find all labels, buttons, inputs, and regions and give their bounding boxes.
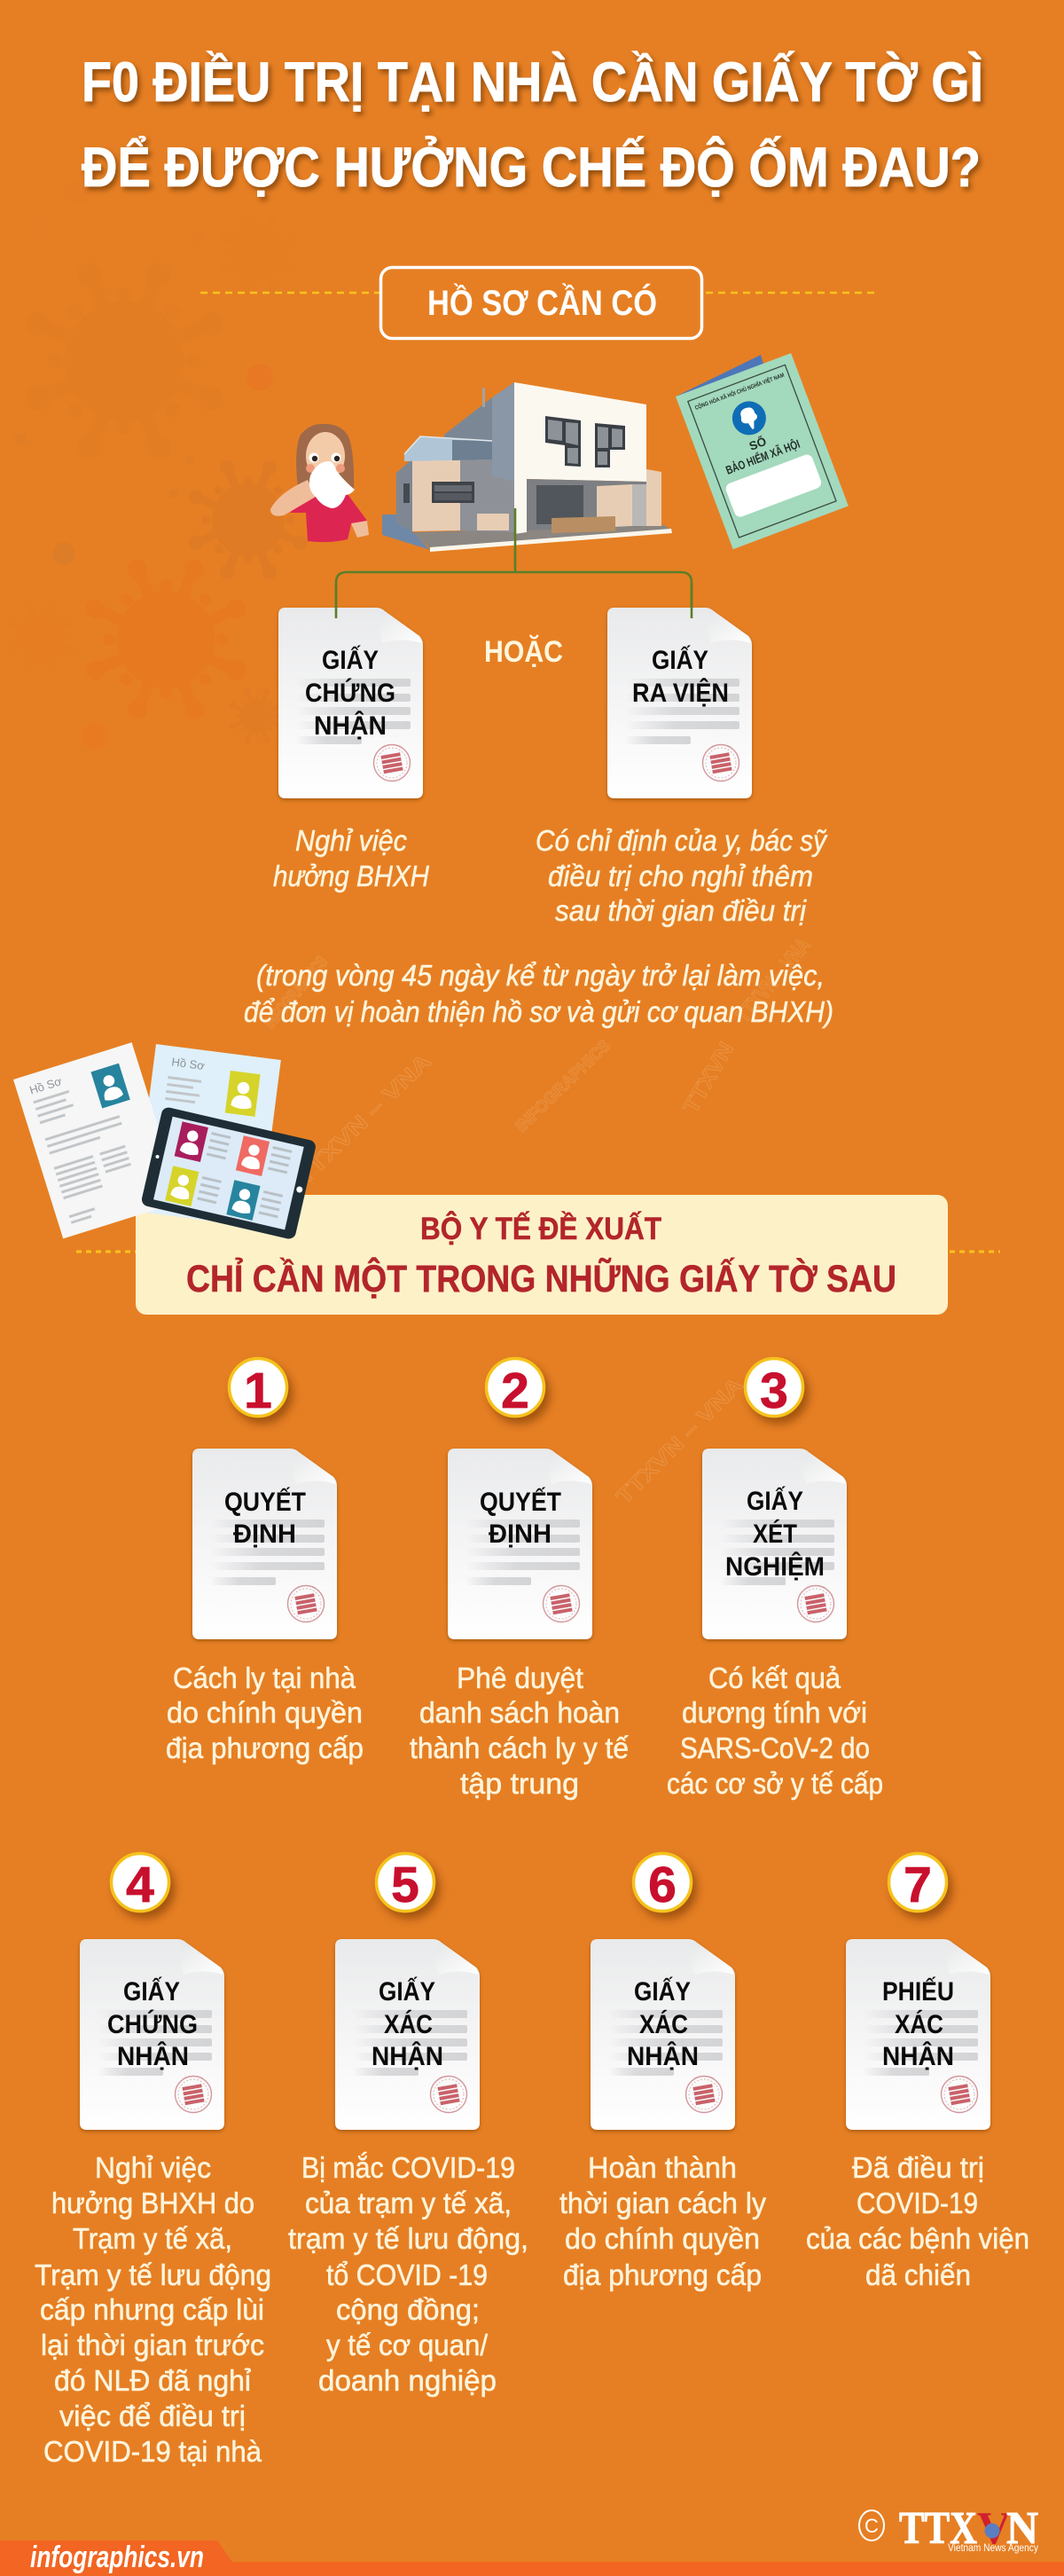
title: ĐỂ ĐƯỢC HƯỞNG CHẾ ĐỘ ỐM ĐAU? (82, 136, 981, 199)
item 7: phiếu xác nhận (806, 1854, 1029, 2291)
logo: TTXVN: N (1006, 2503, 1038, 2554)
label: hoặc: HOẶC (484, 635, 563, 669)
item 1: quyết định, cách ly tại nhà (166, 1359, 364, 1764)
item 2: quyết định, phê duyệt: 2 (501, 1363, 529, 1419)
item 7: phiếu xác nhận: PHIẾU (882, 1976, 954, 2007)
watermarks: TTXVN – VNA (732, 933, 816, 1027)
logo: TTXVN: Vietnam News Agency (948, 2541, 1038, 2554)
document: giấy ra viện: GIẤY (652, 645, 708, 675)
illustration: sick woman (270, 424, 369, 542)
item 7: phiếu xác nhận: dã chiến (865, 2258, 971, 2291)
watermarks: INFOGRAPHICS (512, 1036, 614, 1136)
document: giấy chứng nhận: NHẬN (314, 711, 387, 741)
item 5: giấy xác nhận, bị mắc: XÁC (384, 2009, 433, 2039)
item 5: giấy xác nhận, bị mắc: NHẬN (372, 2041, 443, 2071)
illustration: house (382, 382, 672, 552)
item 6: giấy xác nhận, hoàn thành: Hoàn thành (588, 2151, 737, 2184)
watermarks: TTXVN (679, 1038, 739, 1118)
watermarks: TTXVN – VNA (292, 1049, 436, 1190)
item 3: giấy xét nghiệm: SARS-CoV-2 do (680, 1732, 870, 1764)
item 2: quyết định, phê duyệt: QUYẾT (480, 1487, 561, 1517)
item 7: phiếu xác nhận: Đã điều trị (852, 2151, 984, 2184)
item 6: giấy xác nhận, hoàn thành: địa phương cấp (563, 2258, 762, 2291)
watermarks: TTXVN – VNA (612, 1373, 748, 1509)
item 1: quyết định, cách ly tại nhà: 1 (244, 1363, 272, 1419)
caption: chỉ định: sau thời gian điều trị (555, 894, 808, 927)
item 7: phiếu xác nhận: 7 (904, 1857, 932, 1913)
item 5: giấy xác nhận, bị mắc: GIẤY (379, 1976, 435, 2007)
note: 45 ngày: (trong vòng 45 ngày kể từ ngày trở lại làm việc, (256, 959, 825, 992)
watermarks (261, 933, 816, 1509)
item 4: giấy chứng nhận (35, 1854, 271, 2468)
item 3: giấy xét nghiệm: XÉT (753, 1519, 797, 1549)
item 5: giấy xác nhận, bị mắc (288, 1854, 528, 2397)
logo: TTXVN: TTX (899, 2503, 977, 2554)
item 5: giấy xác nhận, bị mắc: doanh nghiệp (318, 2364, 497, 2397)
item 4: giấy chứng nhận: việc để điều trị (59, 2399, 246, 2432)
item 4: giấy chứng nhận: CHỨNG (107, 2009, 198, 2039)
heading: hồ sơ cần có: HỒ SƠ CẦN CÓ (427, 282, 657, 323)
item 3: giấy xét nghiệm: các cơ sở y tế cấp (667, 1767, 883, 1800)
note: 45 ngày (244, 959, 833, 1028)
illustration: social insurance book: CỘNG HÒA XÃ HỘI CHỦ NGHĨA VIỆT NAM (693, 371, 786, 412)
item 2: quyết định, phê duyệt: danh sách hoàn (419, 1696, 620, 1729)
item 1: quyết định, cách ly tại nhà: ĐỊNH (233, 1520, 296, 1549)
note: 45 ngày: để đơn vị hoàn thiện hồ sơ và gửi cơ quan BHXH) (244, 995, 833, 1028)
item 5: giấy xác nhận, bị mắc: y tế cơ quan/ (326, 2329, 489, 2361)
item 5: giấy xác nhận, bị mắc: Bị mắc COVID-19 (301, 2151, 515, 2184)
document: giấy chứng nhận: CHỨNG (305, 678, 395, 708)
caption: nghỉ việc (273, 824, 429, 892)
background viruses (8, 178, 308, 750)
item 4: giấy chứng nhận: GIẤY (123, 1976, 180, 2007)
item 5: giấy xác nhận, bị mắc: trạm y tế lưu động, (288, 2222, 528, 2255)
item 1: quyết định, cách ly tại nhà: Cách ly tại nhà (173, 1661, 356, 1694)
item 2: quyết định, phê duyệt: ĐỊNH (489, 1520, 552, 1549)
caption: chỉ định: Có chỉ định của y, bác sỹ (536, 824, 828, 857)
banner: bộ y tế đề xuất: BỘ Y TẾ ĐỀ XUẤT (420, 1211, 661, 1246)
connector (336, 508, 692, 618)
item 3: giấy xét nghiệm: NGHIỆM (725, 1551, 825, 1582)
illustration: social insurance book (676, 353, 849, 549)
item 2: quyết định, phê duyệt: thành cách ly y tế (410, 1732, 629, 1764)
item 4: giấy chứng nhận: Nghỉ việc (95, 2151, 211, 2184)
item 4: giấy chứng nhận: Trạm y tế xã, (73, 2222, 232, 2255)
item 1: quyết định, cách ly tại nhà: QUYẾT (224, 1487, 306, 1517)
item 5: giấy xác nhận, bị mắc: cộng đồng; (336, 2293, 480, 2326)
item 6: giấy xác nhận, hoàn thành (559, 1854, 766, 2291)
item 5: giấy xác nhận, bị mắc: của trạm y tế xã, (305, 2187, 512, 2219)
item 3: giấy xét nghiệm: dương tính với (682, 1696, 867, 1729)
item 4: giấy chứng nhận: lại thời gian trước (41, 2329, 264, 2361)
illustration: paper records and tablet: Hồ Sơ (27, 1074, 64, 1097)
item 7: phiếu xác nhận: XÁC (895, 2009, 943, 2039)
caption: nghỉ việc: Nghỉ việc (295, 824, 407, 857)
item 6: giấy xác nhận, hoàn thành: NHẬN (627, 2041, 699, 2071)
illustration: paper records and tablet: Hồ Sơ (171, 1055, 206, 1072)
document: giấy ra viện: RA VIỆN (632, 678, 729, 708)
item 5: giấy xác nhận, bị mắc: tổ COVID -19 (326, 2258, 488, 2291)
document: giấy chứng nhận: GIẤY (322, 645, 379, 675)
watermarks: INFOGRAPHICS (261, 953, 332, 1033)
item 2: quyết định, phê duyệt: Phê duyệt (457, 1661, 583, 1694)
illustration: social insurance book: BẢO HIỂM XÃ HỘI (724, 437, 802, 477)
caption: nghỉ việc: hưởng BHXH (273, 860, 429, 892)
banner: bộ y tế đề xuất: CHỈ CẦN MỘT TRONG NHỮNG GIẤY TỜ SAU (186, 1257, 896, 1300)
item 4: giấy chứng nhận: cấp nhưng cấp lùi (40, 2293, 264, 2326)
title (82, 51, 983, 199)
caption: chỉ định (536, 824, 828, 927)
item 4: giấy chứng nhận: hưởng BHXH do (51, 2187, 254, 2219)
item 5: giấy xác nhận, bị mắc: 5 (391, 1857, 419, 1913)
item 6: giấy xác nhận, hoàn thành: thời gian cách ly (559, 2187, 766, 2219)
illustration: social insurance book: SỔ (747, 435, 768, 453)
item 3: giấy xét nghiệm: 3 (760, 1363, 788, 1419)
item 3: giấy xét nghiệm: Có kết quả (708, 1661, 841, 1694)
item 4: giấy chứng nhận: 4 (126, 1857, 154, 1913)
item 3: giấy xét nghiệm (667, 1359, 883, 1800)
item 1: quyết định, cách ly tại nhà: địa phương cấp (166, 1732, 364, 1764)
heading: hồ sơ cần có (200, 268, 879, 339)
item 2: quyết định, phê duyệt: tập trung (460, 1767, 579, 1800)
item 4: giấy chứng nhận: đó NLĐ đã nghỉ (54, 2364, 252, 2397)
banner: bộ y tế đề xuất (76, 1195, 1000, 1315)
item 7: phiếu xác nhận: COVID-19 (857, 2187, 978, 2219)
logo: TTXVN (859, 2503, 1038, 2554)
logo: TTXVN: C (864, 2515, 879, 2537)
footer bar: infographics.vn (30, 2541, 204, 2574)
item 7: phiếu xác nhận: NHẬN (882, 2041, 954, 2071)
footer bar (0, 2541, 1064, 2576)
item 4: giấy chứng nhận: NHẬN (117, 2041, 189, 2071)
item 6: giấy xác nhận, hoàn thành: XÁC (639, 2009, 688, 2039)
item 7: phiếu xác nhận: của các bệnh viện (806, 2222, 1029, 2255)
item 6: giấy xác nhận, hoàn thành: do chính quyền (565, 2222, 760, 2255)
item 6: giấy xác nhận, hoàn thành: 6 (648, 1857, 677, 1913)
item 6: giấy xác nhận, hoàn thành: GIẤY (634, 1976, 691, 2007)
item 4: giấy chứng nhận: Trạm y tế lưu động (35, 2258, 271, 2291)
logo: TTXVN: V (977, 2503, 1011, 2554)
illustration: paper records and tablet (13, 1042, 317, 1240)
document: giấy ra viện (607, 585, 752, 798)
item 3: giấy xét nghiệm: GIẤY (747, 1486, 803, 1516)
item 4: giấy chứng nhận: COVID-19 tại nhà (43, 2435, 262, 2468)
document: giấy chứng nhận (278, 585, 423, 798)
item 2: quyết định, phê duyệt (410, 1359, 629, 1800)
caption: chỉ định: điều trị cho nghỉ thêm (548, 860, 813, 892)
item 1: quyết định, cách ly tại nhà: do chính quyền (167, 1696, 363, 1729)
